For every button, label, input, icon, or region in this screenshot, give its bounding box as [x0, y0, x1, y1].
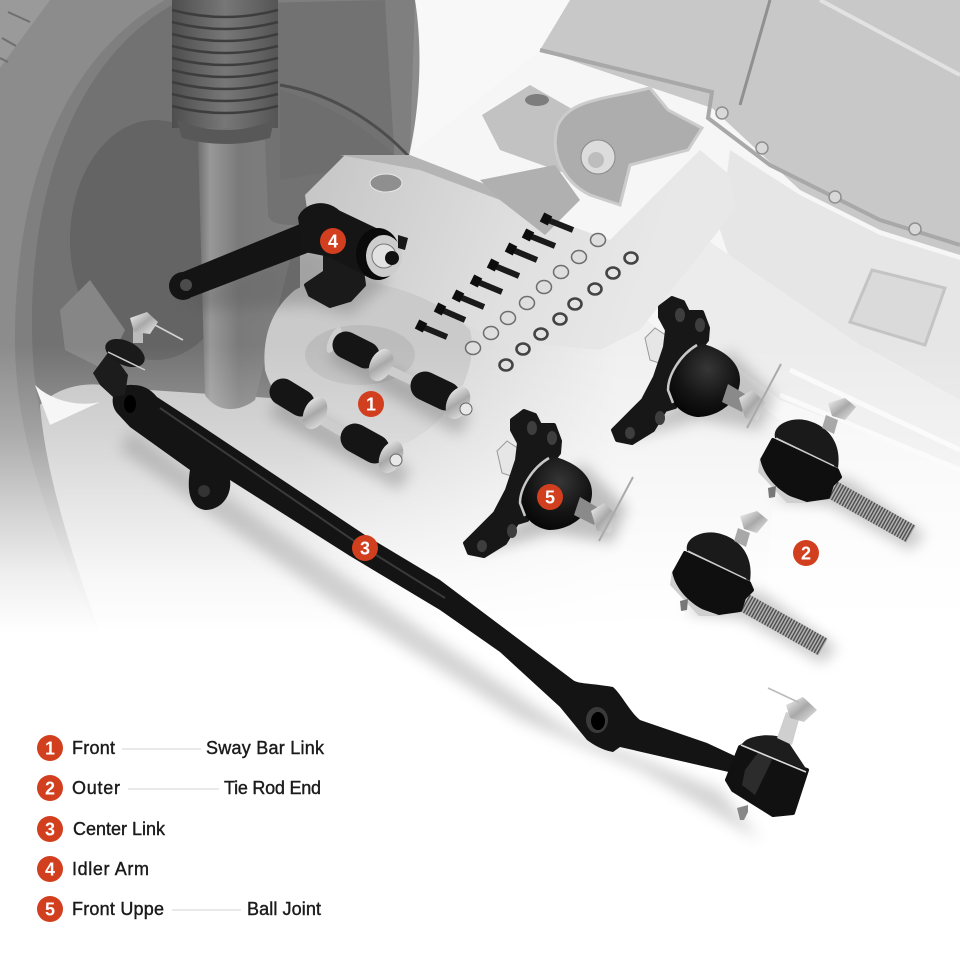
background: frame rail [720, 150, 960, 400]
badge 3 [352, 535, 378, 561]
background: clamp bolt [581, 140, 615, 174]
joint flange [465, 411, 560, 556]
tie rod stud [734, 528, 750, 547]
badge 4: 4 [328, 232, 338, 252]
legend item 4: 4 [45, 860, 55, 880]
background: oil pan grey surface [540, 0, 960, 255]
legend item 2 [37, 775, 321, 801]
background: faded vehicle suspension photo [0, 0, 960, 606]
cotter pin [747, 364, 781, 428]
left ball stud [93, 312, 183, 397]
legend item 5: Ball Joint [247, 899, 321, 919]
background: caliper [60, 280, 125, 370]
idler arm cylinder [300, 205, 380, 275]
background: lower rail highlights [780, 368, 960, 450]
background: light chassis floor [410, 51, 960, 365]
link right bushing [355, 438, 375, 449]
idler arm bracket [306, 255, 364, 306]
background: tire tread [0, 0, 50, 68]
background: rubber boot [172, 0, 278, 144]
center link eye [586, 707, 608, 733]
cotter pin [599, 477, 633, 541]
legend item 3: 3 [45, 820, 55, 840]
background: mount arm [480, 165, 580, 235]
joint rear nut [497, 441, 519, 477]
joint stud [574, 497, 602, 525]
background: frame window [850, 270, 945, 345]
background: wheel rim [15, 0, 415, 452]
background: lower control panel [300, 171, 604, 590]
tie rod thread [833, 490, 911, 534]
part: lower ball joint [465, 411, 633, 556]
background: crossmember shaded edge [340, 155, 500, 200]
link left bushing [283, 392, 301, 403]
joint ring [668, 345, 697, 403]
badge 1: 1 [366, 394, 376, 414]
background: tire [0, 0, 419, 660]
background: spring seat [264, 286, 472, 432]
link rod [318, 418, 345, 434]
right socket [727, 688, 817, 820]
grease nipple [768, 486, 776, 498]
tie rod thread [745, 603, 823, 647]
legend item 1: Front [72, 738, 115, 758]
lock washers [500, 252, 638, 370]
tie rod shadow [687, 583, 837, 663]
link end nut [441, 383, 475, 423]
tie rod cap [758, 458, 812, 503]
tie rod boot [687, 532, 751, 581]
center link shadow [120, 430, 760, 840]
background: mount tube [482, 85, 571, 172]
legend item 3 [37, 816, 166, 842]
castle nut [591, 503, 617, 533]
badge 5: 5 [545, 488, 555, 508]
part: upper ball joint [613, 298, 781, 443]
link washer [364, 345, 398, 385]
joint shadow [625, 350, 775, 440]
center link bar [113, 385, 737, 773]
part: sway bar link lower [275, 392, 408, 480]
link shadow [275, 405, 405, 480]
tie rod body [674, 553, 752, 613]
idler arm shadow [180, 245, 390, 315]
legend item 4 [37, 856, 149, 882]
part: sway bar link upper [324, 325, 475, 425]
joint dome [668, 343, 740, 417]
background: strut tube [198, 140, 300, 409]
idler arm lever [169, 222, 315, 300]
background: wheel gap highlight [35, 385, 100, 425]
legend item 5: Front Uppe [72, 899, 164, 919]
bolts [417, 217, 573, 337]
badge 2 [793, 540, 819, 566]
legend item 1: Sway Bar Link [206, 738, 325, 758]
link left end cap [324, 325, 344, 355]
background: upper light panel [415, 0, 570, 150]
legend item 4: Idler Arm [72, 859, 149, 879]
badge 2: 2 [801, 544, 811, 564]
legend item 5: 5 [45, 900, 55, 920]
legend [37, 735, 325, 922]
joint rear nut [645, 328, 667, 364]
castle nut [739, 390, 765, 420]
joint stud [722, 384, 750, 412]
tie rod shadow [775, 470, 925, 550]
joint flange [613, 298, 708, 443]
part: hardware set of bolts and washers [417, 217, 638, 370]
background: bright wheel floor [40, 384, 300, 582]
legend item 5 [37, 896, 321, 922]
badge 4 [320, 228, 346, 254]
flat washers [466, 234, 606, 354]
tie rod stud [822, 415, 838, 434]
legend item 2: 2 [45, 778, 55, 798]
link end nut [374, 437, 408, 477]
background: oil pan rim [540, 50, 960, 245]
part: center link [93, 312, 817, 840]
joint ring [520, 458, 549, 516]
background: mount clamp [555, 88, 702, 205]
background: crossmember bracket [305, 150, 735, 350]
joint dome [520, 456, 592, 530]
badge 3: 3 [360, 538, 370, 558]
joint shadow [477, 463, 627, 553]
background: wheel inner barrel [32, 0, 394, 414]
legend item 1: 1 [45, 738, 55, 758]
part: lower tie rod end [670, 511, 837, 663]
badge 1 [358, 391, 384, 417]
link washer [298, 393, 332, 433]
background: pan bolts and strut line [716, 0, 960, 235]
joint holes [625, 308, 705, 439]
link left bushing [346, 345, 366, 355]
part: upper tie rod end [758, 398, 925, 550]
grease nipple [680, 599, 688, 611]
tie rod boot [775, 419, 839, 468]
badge 5 [537, 484, 563, 510]
joint holes [477, 421, 557, 552]
center link highlight [160, 408, 445, 598]
link rod [385, 368, 415, 382]
part: idler arm [169, 205, 408, 315]
background: hub shadow [70, 120, 204, 360]
background: lower right rail [662, 242, 960, 406]
tie rod body [762, 440, 840, 500]
link right bushing [425, 386, 446, 396]
idler arm bolt [356, 228, 408, 280]
background: dust shield [280, 90, 400, 180]
legend item 2: Tie Rod End [224, 778, 321, 798]
link shadow [335, 350, 465, 425]
legend item 1 [37, 735, 325, 761]
legend item 2: Outer [72, 778, 120, 798]
legend item 3: Center Link [73, 819, 166, 839]
tie rod cap [670, 571, 724, 616]
background: crossmember hole [370, 174, 402, 192]
